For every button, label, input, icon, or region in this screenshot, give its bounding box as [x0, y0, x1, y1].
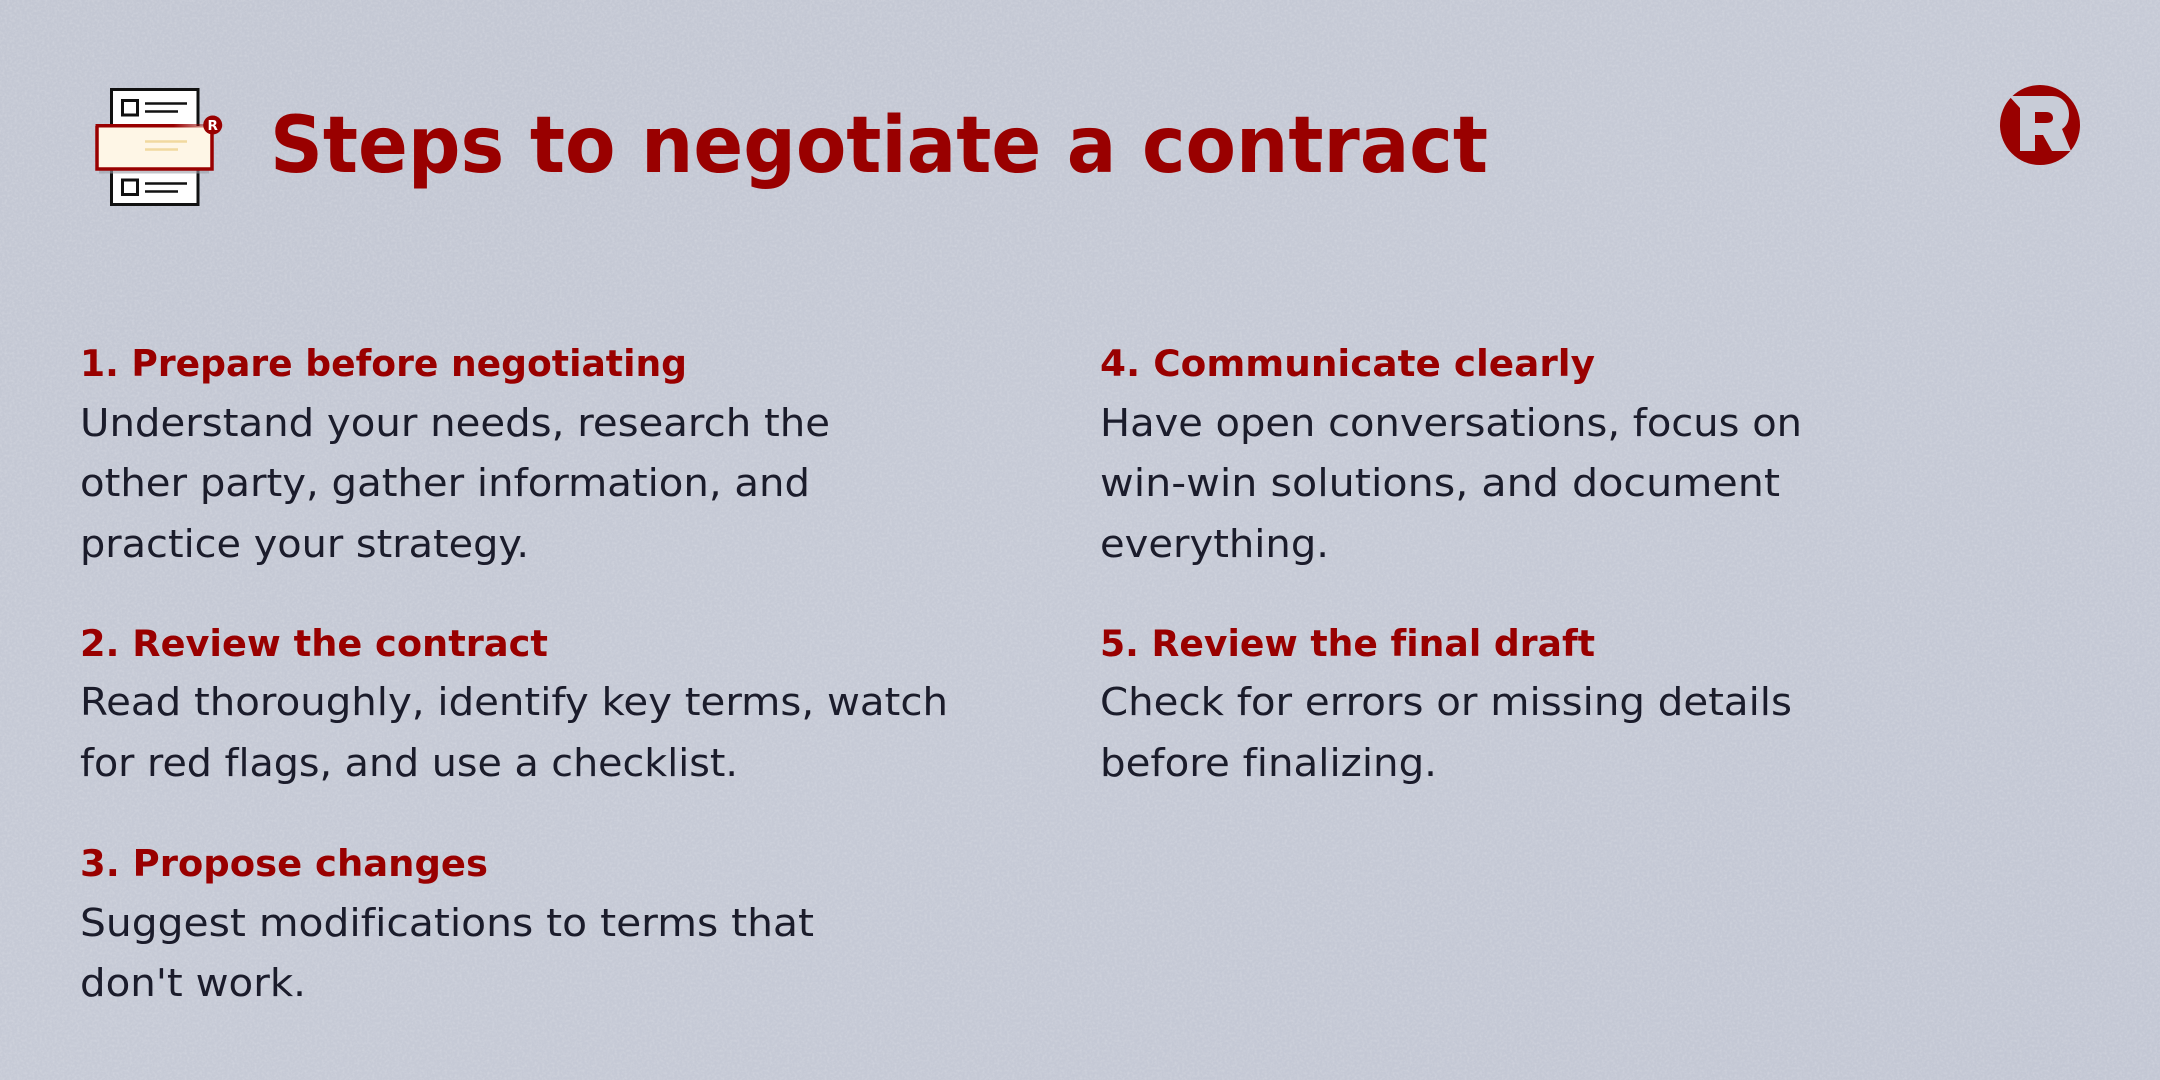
step 2 body: [80, 680, 948, 785]
step 1 body: Understand your needs, research the: [80, 401, 830, 445]
step 1: [80, 342, 830, 566]
step 1 heading: 1. Prepare before negotiating: [80, 342, 687, 385]
step 4 body: win-win solutions, and document: [1100, 461, 1780, 505]
step 4 body: [1100, 401, 1802, 566]
step 2 body: for red flags, and use a checklist.: [80, 741, 738, 785]
step 1 body: other party, gather information, and: [80, 461, 810, 505]
step 3 body: [80, 901, 814, 1005]
step 1 body: practice your strategy.: [80, 522, 529, 566]
step 5 body: before finalizing.: [1100, 741, 1437, 785]
step 3 body: Suggest modifications to terms that: [80, 901, 814, 945]
step 4 body: everything.: [1100, 522, 1329, 566]
step 4 heading: 4. Communicate clearly: [1100, 342, 1595, 385]
icon: contract document: [96, 90, 226, 204]
logo: R mark: [2000, 85, 2080, 165]
step 5 heading: 5. Review the final draft: [1100, 622, 1595, 665]
step 3: [80, 842, 814, 1005]
title: Steps to negotiate a contract: [270, 101, 1488, 191]
step 2 body: Read thoroughly, identify key terms, watch: [80, 680, 948, 724]
step 5: [1100, 622, 1792, 785]
step 4 body: Have open conversations, focus on: [1100, 401, 1802, 445]
step 2: [80, 622, 948, 785]
step 5 body: Check for errors or missing details: [1100, 680, 1792, 724]
step 5 body: [1100, 680, 1792, 785]
step 2 heading: 2. Review the contract: [80, 622, 548, 665]
icon: contract document: R: [207, 118, 218, 134]
step 1 body: [80, 401, 830, 566]
step 3 body: don't work.: [80, 961, 306, 1005]
step 3 heading: 3. Propose changes: [80, 842, 488, 885]
step 4: [1100, 342, 1802, 566]
